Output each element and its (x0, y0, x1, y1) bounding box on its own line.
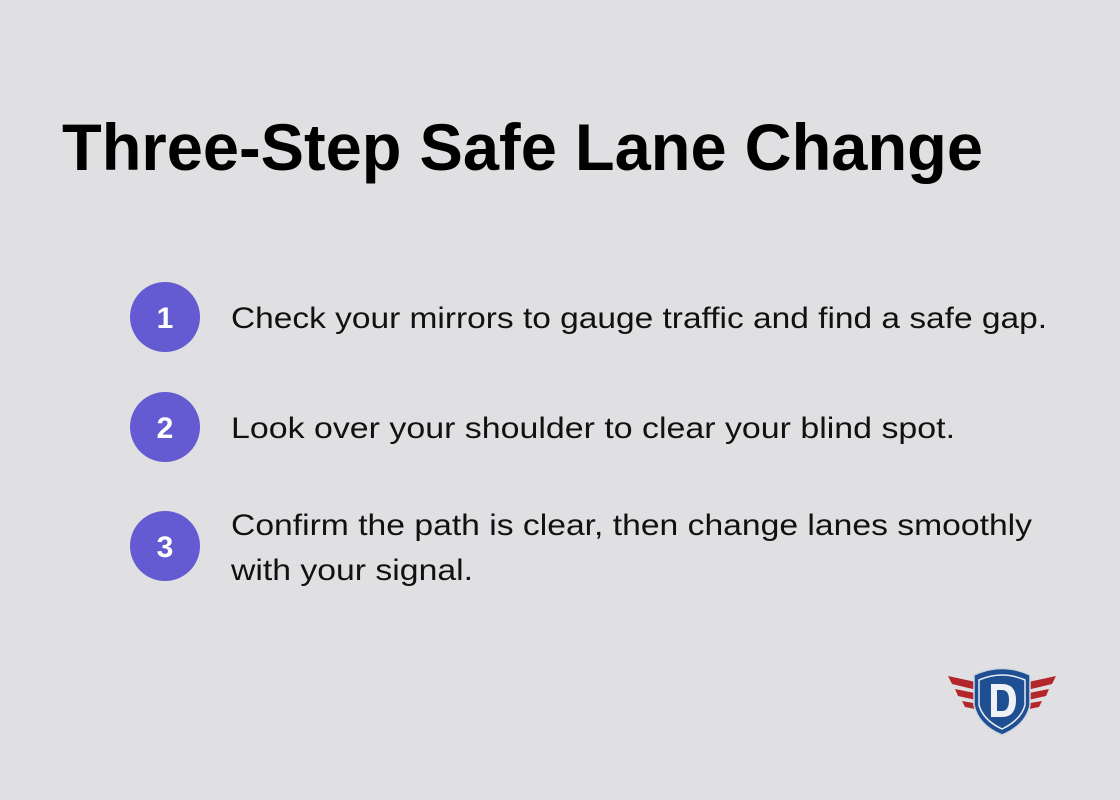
step 3 text (230, 509, 1032, 587)
icon: number 1 circle (130, 282, 200, 352)
icon: number 1 circle: 1 (157, 302, 173, 335)
step 1 (130, 282, 1047, 352)
title: Three-Step Safe Lane Change (62, 110, 983, 184)
step 2 (130, 392, 955, 462)
step 1 text: Check your mirrors to gauge traffic and find a safe gap. (231, 302, 1047, 335)
step 3 text: with your signal. (230, 554, 473, 587)
icon: number 3 circle: 3 (157, 531, 173, 564)
icon: number 2 circle (130, 392, 200, 462)
step 3 (130, 509, 1032, 587)
icon: number 2 circle: 2 (157, 412, 173, 445)
step 3 text: Confirm the path is clear, then change lanes smoothly (231, 509, 1032, 542)
logo: winged shield (948, 668, 1056, 735)
step 2 text: Look over your shoulder to clear your blind spot. (231, 412, 955, 445)
icon: number 3 circle (130, 511, 200, 581)
